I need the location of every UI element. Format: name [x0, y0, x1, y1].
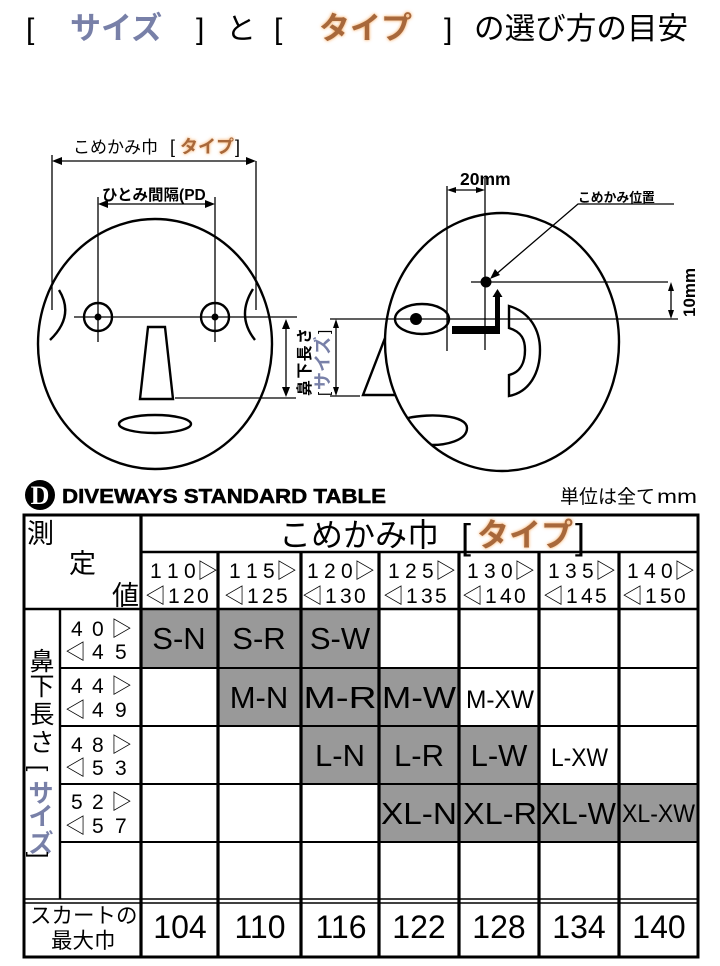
header: temple width type [279, 516, 585, 557]
title: の選び方の目安 [474, 12, 688, 46]
title: ] [196, 13, 204, 46]
temple width label: [ [170, 137, 175, 157]
width range headers: ◁135 [383, 585, 447, 608]
diagram: side view of face [360, 169, 699, 471]
20mm dimension [447, 178, 485, 351]
head outline [385, 213, 619, 471]
width range headers: ◁150 [622, 585, 686, 608]
size-type cell labels: M-R [304, 680, 376, 715]
temple width label [73, 137, 240, 157]
10mm label: 10mm [680, 268, 699, 317]
skirt maximum width values: 128 [472, 909, 526, 945]
mouth profile [408, 415, 467, 445]
nose length ranges: 40▷ [71, 618, 132, 641]
face outline [38, 219, 272, 469]
size label: サイズ [312, 337, 333, 390]
size-type cell labels: L-N [315, 738, 365, 773]
nose length size axis label: イ [28, 803, 54, 831]
skirt maximum width values: 116 [315, 909, 367, 945]
temple width label: タイプ [180, 137, 234, 157]
size-type cell labels: L-W [471, 738, 528, 773]
size-type cell labels: L-XW [551, 744, 608, 772]
table heading: DIVEWAYS STANDARD TABLE [62, 486, 386, 508]
nose length dimension [175, 319, 360, 398]
unit note: mm [657, 487, 697, 508]
temple width label: ] [235, 137, 240, 157]
skirt maximum width values [153, 909, 686, 945]
temple width label: こめかみ巾 [73, 138, 158, 157]
skirt maximum width row label: スカートの [30, 904, 138, 928]
size-type cell labels: XL-N [381, 796, 457, 831]
temple position dot [471, 276, 668, 288]
20mm label: 20mm [460, 169, 511, 189]
size label: [ [316, 391, 333, 396]
temple position callout [490, 190, 674, 279]
nose length size axis label: ] [26, 852, 52, 858]
nose [140, 327, 173, 399]
side eye [395, 304, 449, 334]
width range headers: ◁120 [145, 585, 209, 608]
size-type cell labels: M-W [382, 680, 457, 715]
width range headers: ◁130 [302, 585, 366, 608]
nose length ranges: ◁45 [65, 641, 127, 664]
title [26, 11, 688, 46]
width range headers [145, 560, 695, 608]
ear [509, 306, 540, 396]
width range headers: 115▷ [229, 560, 297, 583]
mouth [119, 415, 191, 433]
skirt maximum width values: 122 [392, 909, 446, 945]
10mm dimension [360, 282, 678, 319]
size-type cell labels: M-N [230, 680, 288, 715]
size-type cell labels: S-N [152, 621, 206, 656]
header: temple width type: ] [575, 516, 585, 557]
measured value corner label [27, 519, 139, 611]
measured value corner label: 値 [112, 581, 139, 611]
nose length size axis label: [ [26, 765, 52, 772]
width range headers: 140▷ [627, 560, 695, 583]
nose length ranges: ◁53 [65, 757, 127, 780]
brand logo [25, 480, 55, 510]
size table [24, 515, 698, 957]
width range headers: ◁125 [224, 585, 288, 608]
size-type cell labels: M-XW [466, 686, 534, 714]
unit note [560, 486, 697, 508]
nose length size axis label: サ [28, 780, 54, 808]
nose length size axis label: さ [29, 729, 55, 757]
title: [ [274, 13, 283, 46]
header: temple width type: こめかみ巾 [279, 517, 439, 553]
nose length size axis label [26, 648, 55, 858]
brand logo: D [31, 481, 49, 510]
nose length size axis label: 下 [29, 673, 55, 701]
gray size cells [141, 609, 698, 842]
table grid [24, 515, 698, 957]
width range headers: 135▷ [548, 560, 616, 583]
nose length label: 鼻下長さ [295, 328, 314, 396]
title: ] [444, 13, 452, 46]
width range headers: 125▷ [388, 560, 456, 583]
size-type cell labels [152, 621, 695, 831]
pupil distance dimension [98, 197, 215, 342]
nose length ranges: 52▷ [71, 791, 132, 814]
title: と [226, 13, 256, 46]
nose length ranges [65, 618, 132, 838]
title: [ [26, 13, 35, 46]
nose length size axis label: 長 [29, 701, 55, 729]
width range headers: ◁140 [462, 585, 526, 608]
nose length ranges: 48▷ [71, 734, 132, 757]
skirt maximum width row label [30, 904, 138, 953]
skirt maximum width row label: 最大巾 [51, 929, 116, 953]
pupil distance label: ひとみ間隔(PD [102, 186, 206, 204]
size-type cell labels: XL-XW [622, 800, 695, 828]
size-type cell labels: XL-W [541, 796, 617, 831]
nose length size axis label: ズ [28, 829, 54, 858]
title: タイプ [319, 11, 412, 46]
nose length ranges: 44▷ [71, 675, 132, 698]
ears [50, 289, 255, 340]
measured value corner label: 定 [69, 549, 96, 579]
nose length ranges: ◁57 [65, 815, 127, 838]
skirt maximum width values: 140 [632, 909, 686, 945]
size label: ] [316, 330, 333, 334]
eyes [74, 303, 297, 331]
temple position callout: こめかみ位置 [578, 190, 655, 205]
measured value corner label: 測 [27, 519, 54, 549]
skirt maximum width values: 110 [234, 909, 286, 945]
header: temple width type: タイプ [477, 517, 573, 553]
nose length ranges: ◁49 [65, 699, 127, 722]
unit note: 単位は全て [560, 486, 655, 508]
width range headers: 130▷ [467, 560, 535, 583]
temple width dimension [52, 155, 256, 310]
nose length size axis label: 鼻 [29, 648, 55, 676]
skirt maximum width values: 134 [552, 909, 606, 945]
title: サイズ [70, 11, 162, 46]
width range headers: 110▷ [150, 560, 218, 583]
size-type cell labels: S-W [310, 621, 371, 656]
size-type cell labels: XL-R [463, 796, 537, 831]
skirt maximum width values: 104 [153, 909, 207, 945]
width range headers: ◁145 [543, 585, 607, 608]
width range headers: 120▷ [307, 560, 375, 583]
direction arrow [452, 289, 502, 334]
size-type cell labels: L-R [394, 738, 444, 773]
diagram: front view of face [38, 137, 360, 469]
header: temple width type: [ [461, 516, 471, 557]
size-type cell labels: S-R [232, 621, 286, 656]
nose profile [363, 338, 395, 395]
